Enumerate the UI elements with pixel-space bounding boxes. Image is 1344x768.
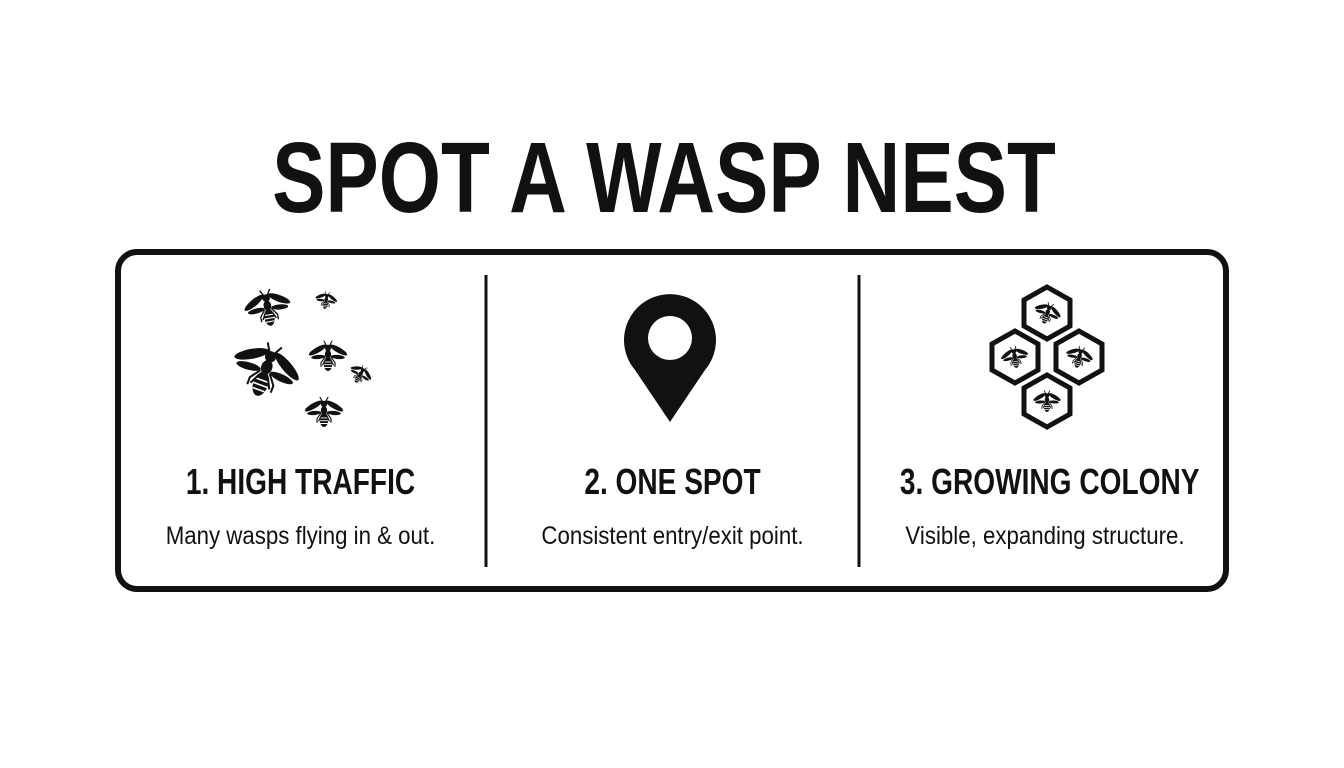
heading 2: 2. ONE SPOT	[584, 461, 761, 502]
heading 1: 1. HIGH TRAFFIC	[186, 461, 415, 502]
text 2: Consistent entry/exit point.	[541, 522, 804, 550]
icon: honeycomb colony	[992, 287, 1102, 427]
text 1: Many wasps flying in & out.	[166, 522, 435, 550]
divider 1	[484, 275, 488, 567]
heading 3: 3. GROWING COLONY	[900, 461, 1199, 502]
title: SPOT A WASP NEST	[272, 122, 1056, 234]
divider 2	[858, 275, 860, 567]
icon: location pin	[624, 294, 716, 422]
text 3: Visible, expanding structure.	[905, 522, 1185, 550]
panel: main frame	[115, 249, 1229, 592]
icon: wasp swarm	[222, 285, 376, 427]
